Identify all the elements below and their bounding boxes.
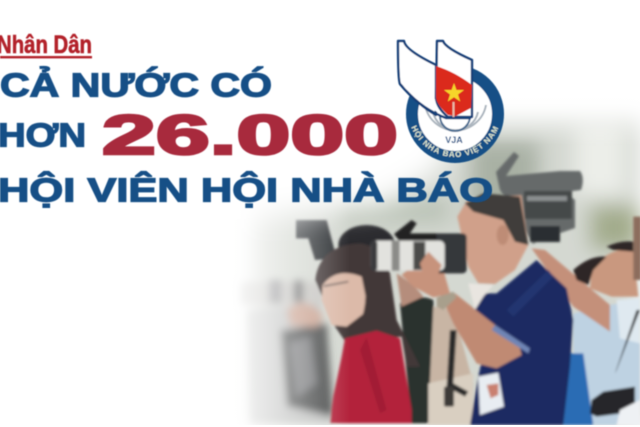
title line 3: HỘI VIÊN HỘI NHÀ BÁO bbox=[0, 170, 493, 208]
right man head bbox=[590, 250, 638, 297]
headline number: 26.000 bbox=[102, 103, 398, 166]
logo ring bbox=[412, 71, 498, 157]
logo: Vietnam Journalists Association bbox=[396, 38, 505, 164]
woman red blouse bbox=[330, 331, 412, 423]
beige bag bbox=[428, 307, 473, 425]
logo white back flag bbox=[398, 41, 436, 115]
right man arm and shirt bbox=[573, 298, 640, 425]
front hand on lens bbox=[420, 252, 442, 278]
hand bbox=[402, 253, 450, 297]
bag straps bbox=[447, 330, 468, 397]
main man shirt bbox=[470, 260, 573, 425]
logo front flag bbox=[436, 41, 472, 117]
soft white glow behind headline bbox=[190, 80, 470, 225]
main man head bbox=[457, 195, 528, 284]
misty photo background bbox=[250, 115, 640, 425]
flash gun bbox=[296, 220, 337, 260]
dark top behind woman bbox=[400, 297, 437, 423]
title line 2: HƠN: HƠN bbox=[0, 116, 86, 154]
left blurred cameras and crowd bbox=[240, 280, 333, 423]
watch bbox=[437, 292, 457, 310]
woman face bbox=[322, 273, 368, 327]
far person dark hair bbox=[338, 225, 395, 265]
logo: Nhan Dan newspaper: Nhân Dân bbox=[0, 31, 92, 59]
long lens camera bbox=[433, 233, 467, 273]
title line 1: CẢ NƯỚC CÓ bbox=[0, 66, 272, 104]
blue backpack bbox=[563, 353, 593, 425]
white fade from left bbox=[200, 100, 350, 427]
woman hair bbox=[315, 243, 420, 367]
white fade from top bbox=[200, 90, 640, 145]
people drawn in zoomed coordinates bbox=[240, 193, 640, 425]
logo: Vietnam Journalists Association: HỘI NHÀ BÁO VIỆT NAM bbox=[410, 124, 499, 158]
logo red flag and star bbox=[436, 66, 472, 116]
badge bbox=[478, 373, 504, 415]
video camera bbox=[496, 152, 583, 244]
main man arm bbox=[440, 293, 522, 368]
bottom right camera bbox=[590, 387, 635, 417]
logo VJA: VJA bbox=[445, 135, 463, 145]
logo ring text bbox=[408, 110, 502, 157]
logo signal arcs bbox=[425, 105, 486, 131]
white band at bottom of photo bbox=[200, 425, 640, 427]
